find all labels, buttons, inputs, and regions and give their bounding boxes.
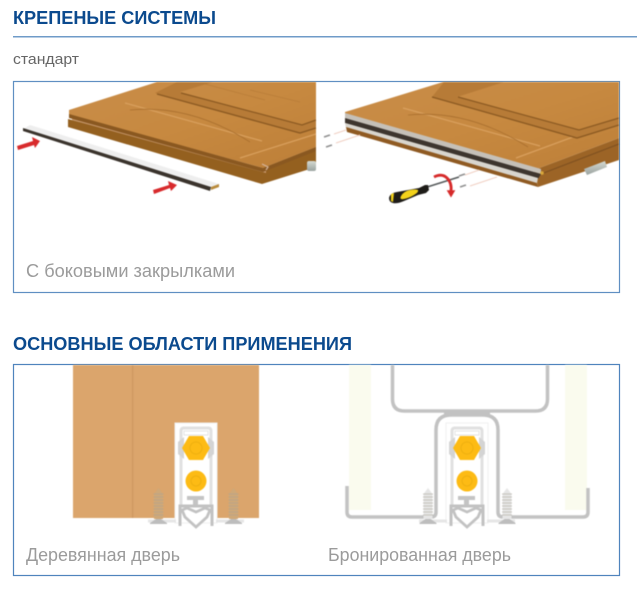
panel: applications — [14, 364, 620, 576]
illustration: wooden door — [73, 365, 259, 527]
heading: main applications: ОСНОВНЫЕ ОБЛАСТИ ПРИМЕНЕНИЯ — [13, 333, 352, 354]
icon: screwdriver — [389, 177, 459, 203]
arrow: left — [17, 137, 40, 150]
illustration: door and seal before mounting — [17, 82, 316, 194]
illustration: door with seal mounted — [324, 82, 619, 203]
arrow: rotation — [434, 175, 454, 196]
arrow: right — [153, 181, 177, 194]
caption: wooden door: Деревянная дверь — [26, 545, 180, 565]
caption: side flaps: С боковыми закрылками — [26, 261, 235, 281]
icon: hinge — [584, 161, 607, 175]
caption: armored door: Бронированная дверь — [328, 545, 511, 565]
illustration: armored door — [347, 365, 588, 527]
panel: side flaps — [14, 82, 620, 292]
title: fastening systems: КРЕПЕНЫЕ СИСТЕМЫ — [13, 7, 216, 28]
subtitle: standard: стандарт — [13, 51, 79, 68]
icon: hinge — [307, 161, 316, 171]
screws — [324, 130, 497, 187]
seal strip — [23, 125, 219, 191]
